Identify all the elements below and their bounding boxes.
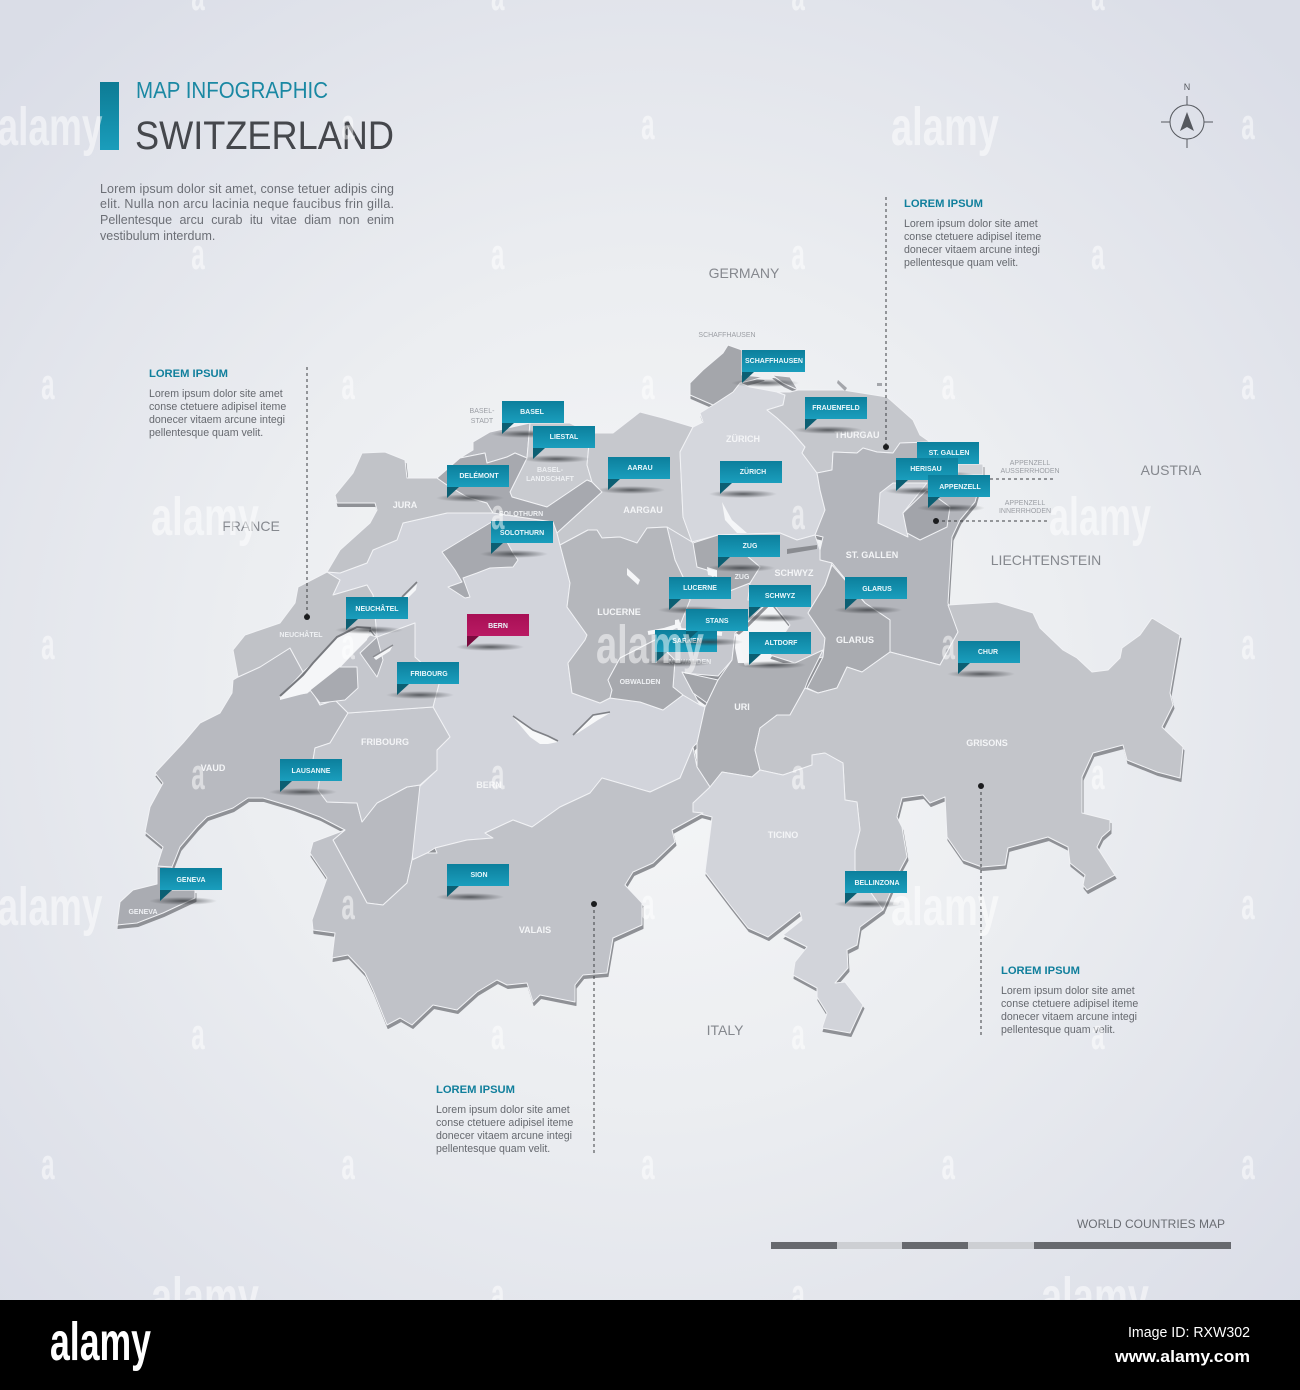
pin: Bellinzona: BELLINZONA (854, 880, 900, 887)
canton labels (128, 430, 1008, 935)
canton: Obwalden (608, 640, 683, 710)
canton labels: JURA (393, 500, 418, 510)
callout: bottom right: LOREM IPSUM (1001, 965, 1080, 977)
watermark: a (341, 359, 355, 409)
lake: Uri (735, 633, 745, 663)
watermark: a (641, 99, 655, 149)
pin: Herisau (885, 458, 958, 495)
watermark: a (1241, 359, 1255, 409)
canton: Vaud (145, 648, 420, 905)
canton: Schaffhausen (690, 345, 763, 405)
watermark: alamy (1049, 487, 1151, 547)
pin: Frauenfeld: FRAUENFELD (812, 405, 860, 412)
pin: Schaffhausen (731, 350, 805, 387)
title: Switzerland: SWITZERLAND (135, 114, 394, 158)
callout: bottom: Lorem ipsum dolor site amet (436, 1104, 570, 1116)
watermark: a (1241, 879, 1255, 929)
canton: Lucerne (560, 527, 690, 703)
watermark: a (1091, 229, 1105, 279)
canton: Appenzell Ausserrhoden (878, 483, 927, 537)
canton: Glarus (807, 565, 890, 693)
scale bar (771, 1242, 1231, 1249)
callout: bottom right: Lorem ipsum dolor site amet (1001, 985, 1135, 997)
watermark: a (791, 1009, 805, 1059)
scale bar caption: WORLD COUNTRIES MAP (1077, 1217, 1225, 1231)
pin: Sarnen (644, 630, 717, 667)
canton: Basel-Stadt (460, 423, 530, 463)
pin: Glarus: GLARUS (862, 586, 892, 593)
canton: St. Gallen (815, 442, 983, 665)
canton labels: SCHWYZ (774, 568, 814, 578)
canton: central light area and Nidwalden (655, 527, 770, 705)
pin: Aarau (597, 457, 670, 494)
pin: Geneva: GENEVA (176, 877, 206, 884)
pin: Appenzell (917, 475, 990, 512)
country labels: GERMANY (709, 265, 780, 281)
footer image id (1114, 1324, 1250, 1366)
footer logo: alamy (50, 1312, 151, 1372)
compass (1161, 82, 1213, 148)
callout: left: conse ctetuere adipisel iteme (149, 401, 286, 413)
country labels: LIECHTENSTEIN (991, 552, 1101, 568)
lake: Zug (707, 567, 717, 577)
watermark: a (41, 359, 55, 409)
callout: left: Lorem ipsum dolor site amet (149, 388, 283, 400)
pin: Altdorf (738, 632, 811, 669)
canton labels: LUCERNE (597, 607, 641, 617)
watermark: alamy (1041, 1267, 1149, 1327)
pin: Lucerne: LUCERNE (683, 585, 717, 592)
callout: left: pellentesque quam velit. (149, 427, 263, 439)
callout: left: donecer vitaem arcune integi (149, 414, 285, 426)
watermark: a (641, 1139, 655, 1189)
watermark: a (191, 749, 205, 799)
pin: Bern capital (456, 614, 529, 651)
callout: bottom: pellentesque quam velit. (436, 1143, 550, 1155)
intro text: Pellentesque arcu curab itu vitae diam non enim (100, 213, 394, 227)
heading: map infographic: MAP INFOGRAPHIC (136, 77, 328, 103)
intro text: elit. Nulla non arcu lacinia neque faucibus frin gilla. (100, 197, 394, 211)
pin: Glarus (834, 577, 907, 614)
canton labels: FRIBOURG (361, 737, 409, 747)
lake: Thun (513, 716, 558, 744)
pin: St. Gallen (906, 442, 979, 479)
watermark: a (1091, 749, 1105, 799)
pin: Appenzell: APPENZELL (939, 484, 982, 491)
lake: Neuchatel (280, 627, 371, 700)
watermark: a (491, 1269, 505, 1319)
lake: Murten (373, 645, 393, 660)
canton: Zurich (680, 383, 825, 542)
canton labels: GRISONS (966, 738, 1008, 748)
watermark: a (941, 1139, 955, 1189)
callout: bottom: conse ctetuere adipisel iteme (436, 1117, 573, 1129)
watermark: a (191, 1009, 205, 1059)
watermark: a (941, 359, 955, 409)
watermark: a (791, 1269, 805, 1319)
lake: Zurich (722, 502, 747, 533)
pin: Bern capital: BERN (488, 623, 508, 630)
callout: bottom: LOREM IPSUM (436, 1084, 515, 1096)
canton labels: GENEVA (128, 909, 158, 916)
callout: bottom right (978, 783, 1138, 1036)
watermark: alamy (891, 97, 999, 157)
lake: Brienz (573, 712, 610, 735)
pin: Delemont: DELÉMONT (459, 471, 499, 480)
callout: bottom right: donecer vitaem arcune integi (1001, 1011, 1137, 1023)
lake: Sempach (627, 568, 640, 585)
pin: Liestal: LIESTAL (550, 434, 579, 441)
pin: Sarnen: SARNEN (672, 638, 702, 645)
pin: Schwyz: SCHWYZ (765, 593, 796, 600)
country labels (222, 265, 1202, 1038)
watermark: a (1241, 99, 1255, 149)
pin: Neuchatel (335, 597, 408, 634)
canton labels: VALAIS (519, 925, 551, 935)
canton: Aargau (557, 412, 693, 545)
pin: Lausanne (269, 759, 342, 796)
watermark: a (791, 229, 805, 279)
canton: Fribourg (313, 707, 450, 822)
pin: St. Gallen: ST. GALLEN (929, 450, 969, 457)
pin: Lucerne (658, 577, 731, 614)
canton: Neuchatel (233, 572, 377, 677)
callout: top right: conse ctetuere adipisel iteme (904, 231, 1041, 243)
watermark: alamy (891, 877, 999, 937)
canton labels: OBWALDEN (620, 679, 660, 686)
watermark: a (1241, 1139, 1255, 1189)
watermark: a (491, 1009, 505, 1059)
external canton labels: APPENZELL (1005, 500, 1045, 507)
watermark: a (341, 1139, 355, 1189)
external canton labels: APPENZELL (1010, 460, 1050, 467)
canton: Schwyz (718, 533, 832, 663)
lake: Biel (402, 582, 417, 600)
watermark: alamy (0, 877, 102, 937)
watermark: a (641, 359, 655, 409)
pin: Zug: ZUG (743, 543, 758, 550)
canton: Grisons (755, 602, 1183, 910)
watermark: a (491, 749, 505, 799)
pin: Delemont (436, 465, 509, 502)
external canton labels: AUSSERRHODEN (1000, 468, 1060, 475)
pin: Bellinzona (834, 871, 907, 908)
canton: Basel-Landschaft (510, 423, 592, 507)
watermark: a (1091, 1009, 1105, 1059)
enclave: Broye (310, 667, 358, 703)
pin: Zurich: ZÜRICH (740, 467, 766, 476)
intro text (100, 182, 394, 243)
canton: Thurgau (767, 390, 930, 473)
canton labels: ST. GALLEN (846, 550, 898, 560)
canton: Schaffhausen east (772, 375, 798, 390)
pin: Lausanne: LAUSANNE (292, 768, 331, 775)
watermark: a (341, 879, 355, 929)
callout: bottom: donecer vitaem arcune integi (436, 1130, 572, 1142)
pin: Aarau: AARAU (627, 465, 653, 472)
footer image id: www.alamy.com (1114, 1347, 1250, 1366)
watermark: a (191, 229, 205, 279)
watermark: a (491, 489, 505, 539)
canton: Solothurn north (437, 453, 602, 533)
canton labels: LANDSCHAFT (526, 476, 575, 483)
canton labels: ZUG (735, 574, 750, 581)
canton: Jura (327, 452, 493, 573)
external canton labels (470, 332, 1060, 515)
intro text: vestibulum interdum. (100, 229, 215, 243)
pin: Fribourg: FRIBOURG (410, 671, 448, 678)
compass: N (1184, 82, 1190, 92)
canton labels: BASEL- (537, 467, 564, 474)
callout: bottom right: conse ctetuere adipisel iteme (1001, 998, 1138, 1010)
watermark: alamy (0, 97, 102, 157)
callout: top right: donecer vitaem arcune integi (904, 244, 1040, 256)
watermark: a (941, 619, 955, 669)
canton: Zug (693, 535, 760, 592)
canton labels: AARGAU (623, 505, 663, 515)
canton: Bern (327, 513, 705, 860)
canton: Uri (697, 633, 823, 787)
canton: St. Gallen patch (958, 464, 983, 475)
lake: Walensee (787, 545, 817, 554)
callout: top right: pellentesque quam velit. (904, 257, 1018, 269)
watermark: a (1241, 619, 1255, 669)
watermark: a (341, 619, 355, 669)
canton labels: NIDWALDEN (669, 659, 711, 666)
watermark: a (491, 229, 505, 279)
canton: Obwalden exclave (682, 672, 718, 703)
footer image id: Image ID: RXW302 (1128, 1324, 1250, 1341)
pin: Frauenfeld (794, 397, 867, 434)
title accent bar (100, 82, 119, 150)
callout: top right: Lorem ipsum dolor site amet (904, 218, 1038, 230)
watermark: a (791, 749, 805, 799)
callout: bottom right: pellentesque quam velit. (1001, 1024, 1115, 1036)
intro text: Lorem ipsum dolor sit amet, conse tetuer adipis cing (100, 182, 394, 196)
watermark: alamy (151, 1267, 259, 1327)
watermark: a (341, 99, 355, 149)
country labels: ITALY (707, 1022, 744, 1038)
lake: Lucerne (648, 620, 722, 634)
pin: Solothurn (480, 521, 553, 558)
canton labels: BERN (476, 780, 502, 790)
cantons (117, 345, 1183, 1033)
pin: Zug (707, 535, 780, 572)
canton: Geneva (117, 866, 195, 925)
watermark: a (41, 1139, 55, 1189)
external canton labels: INNERRHODEN (999, 508, 1051, 515)
pin: Fribourg (386, 662, 459, 699)
watermark: alamy (596, 615, 704, 675)
canton labels: VAUD (201, 763, 226, 773)
canton: Appenzell Innerrhoden (903, 490, 950, 540)
watermark: alamy (151, 487, 259, 547)
watermark: a (41, 619, 55, 669)
pin: Sion: SION (470, 872, 488, 879)
pin: Schwyz (738, 585, 811, 622)
pin: Basel: BASEL (520, 409, 545, 416)
external canton labels: SCHAFFHAUSEN (698, 332, 756, 339)
pin: Chur: CHUR (978, 649, 998, 656)
pin: Basel (491, 401, 564, 438)
canton labels: URI (734, 702, 750, 712)
pin: Stans: STANS (705, 618, 729, 625)
canton: Ticino (693, 753, 883, 1033)
pin: Altdorf: ALTDORF (765, 640, 798, 647)
canton: Valais (310, 747, 710, 1025)
callout: bottom (436, 901, 597, 1155)
callout: top right (883, 197, 1041, 450)
canton labels: GLARUS (836, 635, 874, 645)
canton labels: THURGAU (834, 430, 880, 440)
watermark: a (791, 489, 805, 539)
lake Constance islands (837, 380, 882, 391)
pin: Herisau: HERISAU (910, 466, 942, 473)
leader lines: Appenzell (933, 479, 1055, 524)
pin: Sion (436, 864, 509, 901)
map of Switzerland (117, 345, 1183, 1033)
callout: left (149, 367, 310, 620)
country labels: AUSTRIA (1141, 462, 1202, 478)
callout: top right: LOREM IPSUM (904, 198, 983, 210)
canton labels: NEUCHÂTEL (279, 630, 323, 639)
pin: Stans (675, 609, 748, 646)
canton labels: ZÜRICH (726, 434, 760, 444)
pin: Neuchatel: NEUCHÂTEL (355, 604, 399, 613)
country labels: FRANCE (222, 518, 280, 534)
pin: Zurich (709, 461, 782, 498)
pin: Chur (947, 641, 1020, 678)
canton: Solothurn south (442, 520, 518, 598)
external canton labels: BASEL- (470, 408, 495, 415)
canton labels: TICINO (768, 830, 798, 840)
external canton labels: STADT (471, 418, 494, 425)
footer band (0, 1300, 1300, 1390)
callout: left: LOREM IPSUM (149, 368, 228, 380)
watermark: a (641, 879, 655, 929)
pin: Liestal (522, 426, 595, 463)
enclave: Vully (360, 637, 383, 677)
pin: Solothurn: SOLOTHURN (500, 530, 544, 537)
canton: Fribourg north and Broye (307, 623, 440, 713)
pin: Geneva (149, 868, 222, 905)
canton labels: SOLOTHURN (499, 511, 543, 518)
pin: Schaffhausen: SCHAFFHAUSEN (745, 358, 803, 365)
